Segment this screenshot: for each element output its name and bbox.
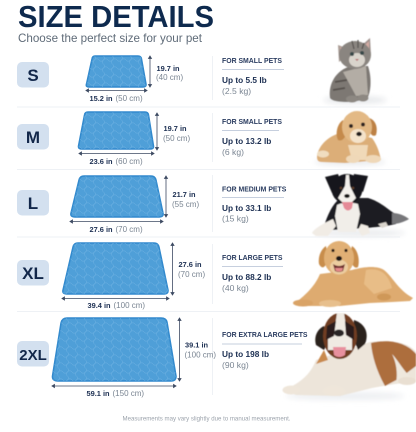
width label XL: 39.4 in (100 cm) xyxy=(88,301,145,310)
size badge L xyxy=(17,190,49,216)
size badge 2XL xyxy=(17,341,49,366)
size badge L: L xyxy=(28,194,38,213)
height label 2XL: (100 cm) xyxy=(184,350,216,360)
dimension arrows L xyxy=(70,176,168,223)
pet info XL: FOR LARGE PETS xyxy=(222,255,283,262)
width label S: 15.2 in (50 cm) xyxy=(90,94,143,103)
width label 2XL: 59.1 in (150 cm) xyxy=(86,389,144,398)
dimension arrows 2XL xyxy=(52,318,181,388)
golden retriever photo xyxy=(293,241,413,307)
pet info M xyxy=(222,119,282,157)
mat M xyxy=(78,112,154,149)
pet info L: FOR MEDIUM PETS xyxy=(222,186,287,194)
dimension arrows S xyxy=(86,56,152,92)
pet info XL: (40 kg) xyxy=(222,283,249,293)
height label 2XL xyxy=(184,340,216,360)
row separators xyxy=(17,56,400,395)
pet info S: FOR SMALL PETS xyxy=(222,58,282,65)
height label XL: 27.6 in xyxy=(178,260,202,269)
row: M xyxy=(17,111,386,166)
height label S xyxy=(156,64,183,82)
pet info L: Up to 33.1 lb xyxy=(222,203,271,213)
puppy photo xyxy=(314,111,386,165)
width label L: 27.6 in (70 cm) xyxy=(90,225,143,234)
width label M: 23.6 in (60 cm) xyxy=(90,157,143,166)
pet info 2XL: FOR EXTRA LARGE PETS xyxy=(222,332,308,339)
height label 2XL: 39.1 in xyxy=(185,340,208,350)
pet info XL: Up to 88.2 lb xyxy=(222,272,271,282)
row: XL xyxy=(17,241,413,310)
pet info 2XL: Up to 198 lb xyxy=(222,349,269,359)
footnote: Measurements may vary slightly due to manual measurement. xyxy=(122,416,291,422)
mat 2XL xyxy=(52,318,176,381)
pet info S: (2.5 kg) xyxy=(222,86,251,96)
size badge XL xyxy=(17,260,49,286)
pet info M: (6 kg) xyxy=(222,147,244,157)
pet info 2XL: (90 kg) xyxy=(222,360,249,370)
border collie photo xyxy=(312,174,409,236)
pet info 2XL xyxy=(222,332,308,370)
row: L xyxy=(17,174,409,236)
height label L: (55 cm) xyxy=(172,200,199,209)
height label S: 19.7 in xyxy=(156,64,180,73)
size badge M xyxy=(17,124,49,150)
size badge 2XL: 2XL xyxy=(19,347,47,364)
title: SIZE DETAILS xyxy=(18,0,214,34)
row: 2XL xyxy=(17,313,416,400)
pet info S xyxy=(222,58,284,96)
size badge S: S xyxy=(27,66,39,85)
height label L: 21.7 in xyxy=(172,190,196,199)
height label XL: (70 cm) xyxy=(178,270,205,279)
pet info M: Up to 13.2 lb xyxy=(222,136,271,146)
height label XL xyxy=(178,260,205,279)
mat L xyxy=(71,176,163,217)
height label L xyxy=(172,190,199,209)
size badge XL: XL xyxy=(22,264,44,283)
saint bernard photo xyxy=(282,313,416,400)
height label M xyxy=(163,124,190,143)
subtitle: Choose the perfect size for your pet xyxy=(18,31,203,45)
mat XL xyxy=(63,243,168,294)
height label M: 19.7 in xyxy=(164,124,187,133)
pet info L: (15 kg) xyxy=(222,214,249,224)
pet info M: FOR SMALL PETS xyxy=(222,119,282,126)
size badge S xyxy=(17,62,49,88)
pet info S: Up to 5.5 lb xyxy=(222,75,267,85)
dimension arrows M xyxy=(79,113,158,155)
pet info L xyxy=(222,186,287,224)
mat S xyxy=(86,56,146,87)
pet info XL xyxy=(222,255,283,293)
cat photo xyxy=(323,38,387,104)
size badge M: M xyxy=(26,128,40,147)
row: S xyxy=(17,38,387,104)
height label S: (40 cm) xyxy=(156,73,183,82)
height label M: (50 cm) xyxy=(163,134,190,143)
dimension arrows XL xyxy=(62,243,174,300)
